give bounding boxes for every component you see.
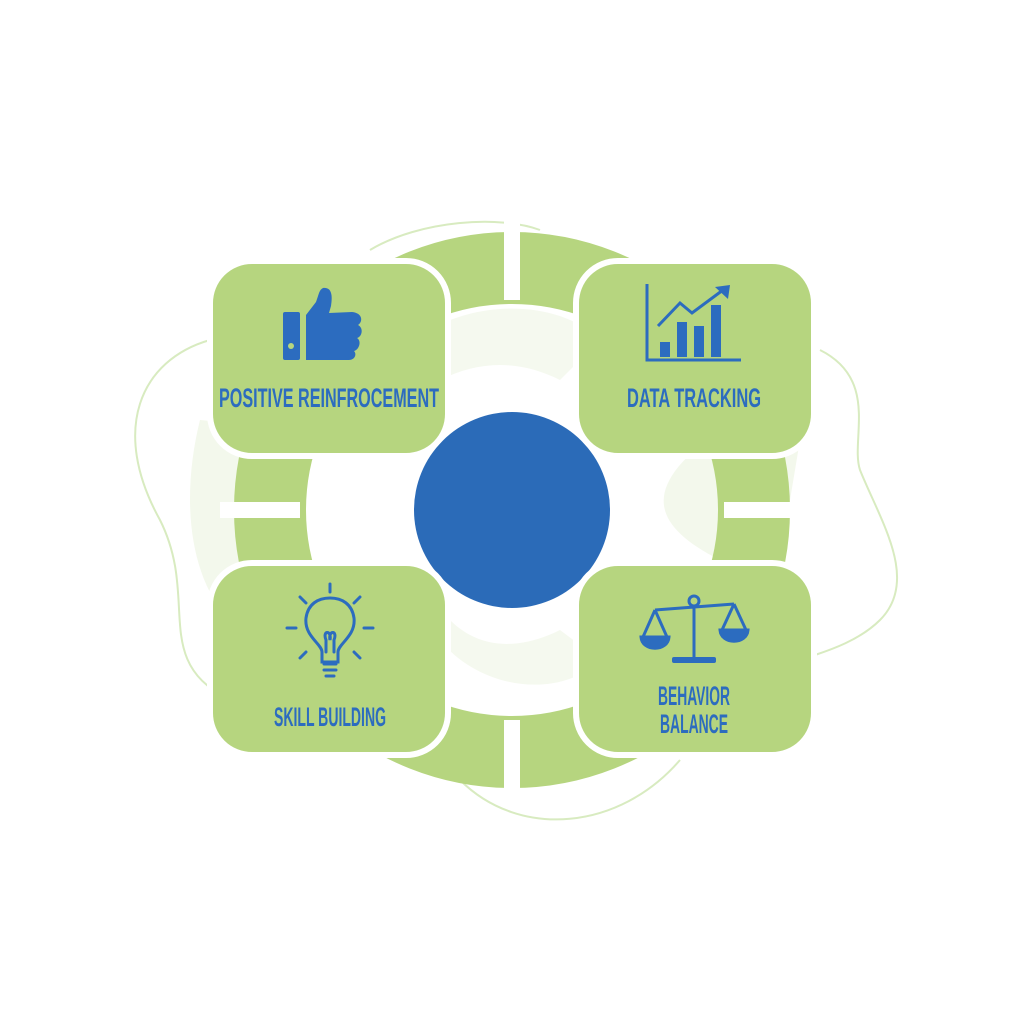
icon: chart: [647, 284, 741, 360]
ring segments: [220, 220, 804, 800]
center circle: [414, 412, 610, 608]
background wavy decoration: [135, 222, 897, 819]
card: positive reinforcement: [210, 261, 448, 456]
card: behavior balance: [576, 563, 814, 755]
icon: scales: [641, 596, 748, 663]
card: data tracking: [576, 261, 814, 456]
card: skill building: [210, 563, 448, 755]
label: DATA TRACKING: [627, 383, 761, 413]
label: BEHAVIOR: [658, 681, 730, 711]
icon: thumbs up: [283, 288, 362, 360]
label: SKILL BUILDING: [274, 702, 386, 732]
card: behavior balance: BALANCE: [660, 709, 728, 739]
icon: lightbulb: [287, 584, 373, 676]
label: POSITIVE REINFROCEMENT: [219, 383, 439, 413]
